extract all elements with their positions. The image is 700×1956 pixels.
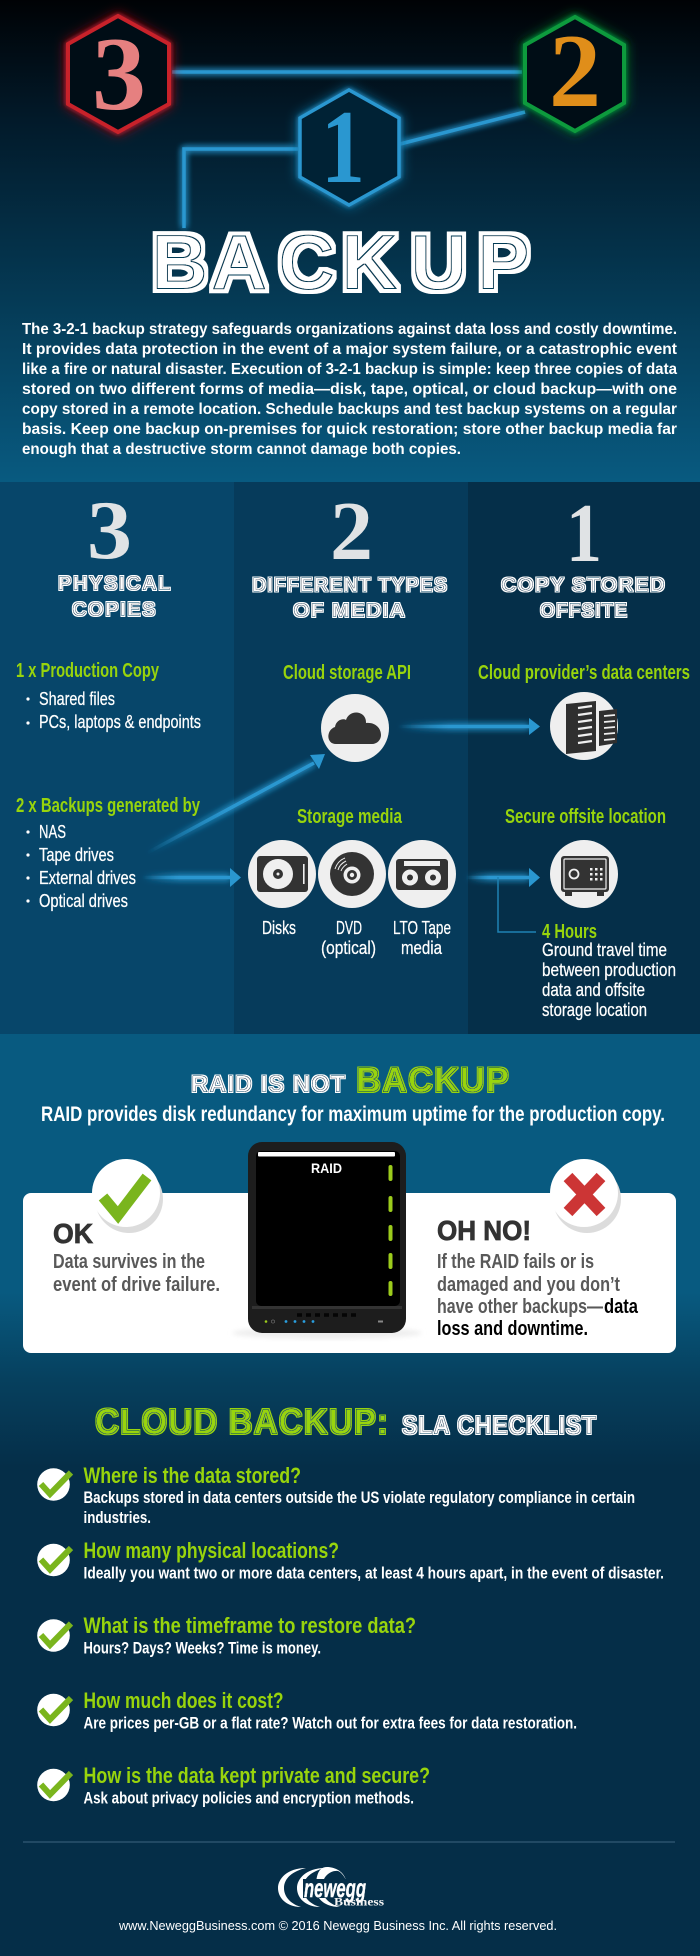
text block: Oh no: data: [604, 1295, 638, 1318]
text block: backups list: NAS: [39, 821, 66, 842]
text block: backups list: Optical drives: [39, 890, 128, 911]
checklist item: timeframe: [37, 1613, 416, 1658]
heading: physical copies: PHYSICAL: [58, 572, 172, 595]
image: RAID NAS device: RAID: [311, 1160, 342, 1176]
icon: DVD disc: [318, 840, 386, 908]
checklist item: where stored: industries.: [84, 1508, 151, 1527]
text block: 4 hours travel time: storage location: [542, 999, 647, 1020]
icon: OK check badge: [92, 1159, 163, 1233]
icon: cloud: [321, 694, 389, 762]
text block: Oh no: have other backups—: [437, 1295, 603, 1318]
text block: production copy list: Shared files: [39, 688, 115, 709]
text block: OK: [53, 1218, 220, 1296]
text block: 4 hours travel time: between production: [542, 959, 676, 980]
checklist item: timeframe: What is the timeframe to restore data?: [84, 1613, 416, 1638]
panel: column 1 offsite background: [468, 482, 700, 1034]
text block: backups list: [16, 794, 200, 911]
background: lower sections gradient: [0, 1034, 700, 1956]
text block: OK: OK: [53, 1218, 93, 1249]
icon: blue hexagon number 1: [300, 88, 399, 205]
text block: backups list: External drives: [39, 867, 136, 888]
icon: red hexagon number 3: [68, 15, 169, 132]
text block: Oh no: OH NO!: [437, 1215, 531, 1246]
intro paragraph: enough that a destructive storm cannot damage both copies.: [22, 441, 461, 458]
text block: Oh no: If the RAID fails or is: [437, 1250, 594, 1273]
checklist item: privacy: [37, 1763, 430, 1808]
heading: RAID is not backup: [191, 1061, 510, 1100]
intro paragraph: like a fire or natural disaster. Execution of 3-2-1 backup is simple: keep three copies of data: [22, 361, 677, 378]
caption: LTO tape media: media: [401, 937, 443, 958]
label: cloud storage API: Cloud storage API: [283, 661, 411, 684]
heading: copy stored offsite: COPY STORED: [501, 574, 666, 596]
heading: cloud backup SLA checklist: SLA CHECKLIST: [402, 1410, 597, 1440]
footer copyright: www.NeweggBusiness.com © 2016 Newegg Business Inc. All rights reserved.: [118, 1918, 557, 1933]
text block: Oh no: damaged and you don’t: [437, 1273, 620, 1296]
icon: check: [37, 1468, 71, 1501]
text block: production copy list: [16, 659, 201, 732]
intro paragraph: [22, 321, 677, 458]
icon: safe: [550, 840, 618, 908]
arrow: cloud to data centers: [398, 718, 540, 735]
arrow: backups to cloud: [147, 754, 325, 853]
panel: column 2 media types background: [234, 482, 468, 1034]
heading: cloud backup SLA checklist: [95, 1401, 597, 1442]
heading: different types of media: [252, 574, 448, 622]
intro paragraph: basis. Keep one backup on-premises for quick restoration; store other backup media far: [22, 421, 677, 438]
intro paragraph: stored on two different forms of media—disk, tape, optical, or cloud backup—with one: [22, 381, 677, 398]
heading: cloud backup SLA checklist: CLOUD BACKUP:: [95, 1401, 389, 1442]
caption: LTO tape media: [393, 917, 451, 958]
checklist item: where stored: Where is the data stored?: [84, 1463, 301, 1488]
arrow: storage media to offsite: [466, 868, 540, 932]
text block: backups list: 2 x Backups generated by: [16, 794, 200, 817]
checklist item: privacy: Ask about privacy policies and encryption methods.: [84, 1788, 414, 1808]
image: RAID NAS device: [232, 1142, 422, 1339]
header network graphic: [68, 12, 624, 228]
text block: backups list: Tape drives: [39, 844, 114, 865]
connector lines between hexagons: [172, 72, 525, 228]
icon: tape cassette: [388, 840, 456, 908]
big number 3: 3: [87, 484, 132, 577]
checklist item: cost: How much does it cost?: [84, 1688, 284, 1713]
heading: physical copies: [58, 572, 172, 621]
icon: server racks: [550, 692, 618, 760]
logo: Newegg Business: [278, 1867, 385, 1908]
text block: 4 hours travel time: Ground travel time: [542, 939, 667, 960]
icon: check: [37, 1694, 71, 1726]
label: storage media: Storage media: [297, 805, 402, 828]
checklist item: physical locations: [37, 1538, 664, 1582]
caption: DVD optical: DVD: [336, 917, 362, 938]
logo: Newegg Business: Business: [334, 1896, 385, 1908]
text block: production copy list: 1 x Production Copy: [16, 659, 159, 682]
heading: physical copies: COPIES: [72, 598, 157, 621]
caption: DVD optical: (optical): [321, 937, 376, 958]
caption: DVD optical: [321, 917, 376, 958]
icon: check: [37, 1769, 71, 1801]
icon: green hexagon number 2: 2: [549, 12, 601, 129]
text block: OK: Data survives in the: [53, 1250, 205, 1273]
background: header gradient: [0, 0, 700, 482]
logo: Newegg Business: newegg: [304, 1873, 366, 1903]
big number 2: 2: [330, 485, 373, 578]
checklist item: cost: [37, 1688, 577, 1732]
text block: OK: event of drive failure.: [53, 1273, 220, 1296]
checklist item: timeframe: Hours? Days? Weeks? Time is money.: [84, 1638, 321, 1658]
checklist item: physical locations: How many physical locations?: [84, 1538, 339, 1563]
title: BACKUP: [152, 218, 530, 306]
icon: check: [37, 1619, 71, 1652]
heading: copy stored offsite: [501, 574, 666, 622]
intro paragraph: It provides data protection in the event of a major system failure, or a catastrophic event: [22, 341, 677, 358]
heading: different types of media: DIFFERENT TYPES: [252, 574, 448, 596]
icon: blue hexagon number 1: 1: [321, 88, 365, 205]
text block: Oh no: [437, 1215, 638, 1340]
icon: hard disk: [248, 840, 316, 908]
caption: disks: Disks: [262, 917, 296, 938]
text block: 4 hours travel time: 4 Hours: [542, 920, 597, 943]
intro paragraph: copy stored in a remote location. Schedule backups and test backup systems on a regular: [22, 401, 677, 418]
text block: production copy list: PCs, laptops & endpoints: [39, 711, 201, 732]
checklist item: cost: Are prices per-GB or a flat rate? Watch out for extra fees for data restoration.: [84, 1714, 577, 1732]
text block: Oh no: loss and downtime.: [437, 1317, 588, 1340]
heading: copy stored offsite: OFFSITE: [540, 599, 628, 622]
heading: different types of media: OF MEDIA: [293, 599, 406, 622]
icon: check: [37, 1544, 71, 1576]
caption: LTO tape media: LTO Tape: [393, 917, 451, 938]
arrow: backups to storage media: [142, 868, 241, 887]
text block: 4 hours travel time: data and offsite: [542, 979, 645, 1000]
heading: RAID is not backup: BACKUP: [356, 1061, 510, 1100]
heading: RAID is not backup: RAID IS NOT: [191, 1071, 346, 1098]
text block: 4 hours travel time: [542, 920, 676, 1020]
panel: column 3 physical copies background: [0, 482, 234, 1034]
big number 1: 1: [566, 487, 602, 580]
checklist item: where stored: [37, 1463, 635, 1527]
checklist item: privacy: How is the data kept private and secure?: [84, 1763, 430, 1788]
icon: green hexagon number 2: [525, 12, 624, 131]
panel: white OK / Oh no card: [23, 1193, 676, 1353]
icon: fail X badge: [550, 1159, 621, 1233]
icon: red hexagon number 3: 3: [92, 15, 146, 132]
intro paragraph: The 3-2-1 backup strategy safeguards organizations against data loss and costly downtime.: [22, 321, 677, 338]
